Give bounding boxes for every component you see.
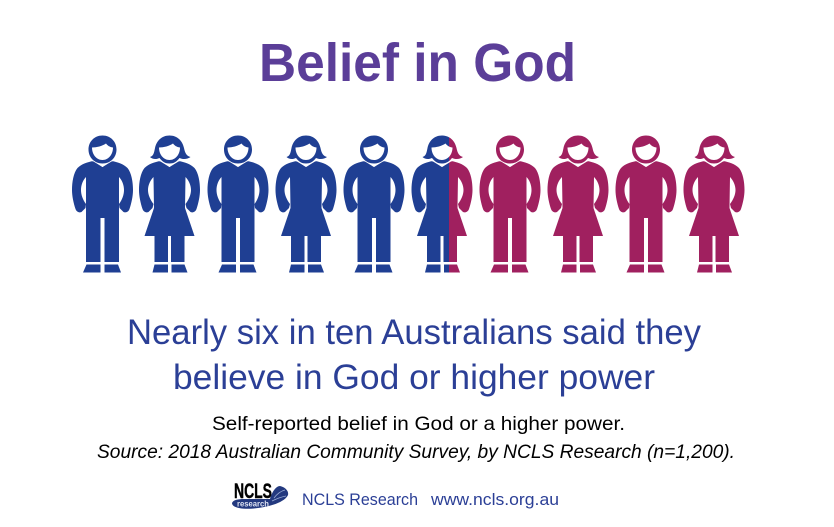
footer credit: NCLS Research — [302, 490, 418, 509]
pictogram: ten people, six believers — [72, 134, 744, 272]
icon: blue woman 4 — [276, 134, 336, 272]
title: Belief in God — [259, 33, 576, 93]
footer credit: www.ncls.org.au — [430, 490, 559, 509]
icon: magenta man 7 — [480, 134, 540, 272]
source note: Self-reported belief in God or a higher power. — [212, 414, 625, 435]
source note: Source: 2018 Australian Community Survey, by NCLS Research (n=1,200). — [97, 442, 735, 463]
icon: blue man 3 — [208, 134, 268, 272]
logo: NCLS research: NCLS — [234, 480, 272, 503]
icon: blue man 1 — [72, 134, 133, 272]
icon: blue man 5 — [344, 134, 404, 272]
footer credit — [302, 490, 559, 509]
icon: half blue half magenta woman 6 — [412, 134, 472, 272]
icon: magenta woman 8 — [548, 134, 608, 272]
icon: magenta woman 10 — [684, 134, 744, 272]
logo: NCLS research: research — [237, 500, 269, 508]
headline statement — [127, 313, 701, 397]
icon: magenta man 9 — [616, 134, 676, 272]
source note — [97, 414, 735, 463]
icon: blue woman 2 — [139, 134, 200, 272]
headline statement: believe in God or higher power — [173, 358, 655, 397]
headline statement: Nearly six in ten Australians said they — [127, 313, 701, 352]
